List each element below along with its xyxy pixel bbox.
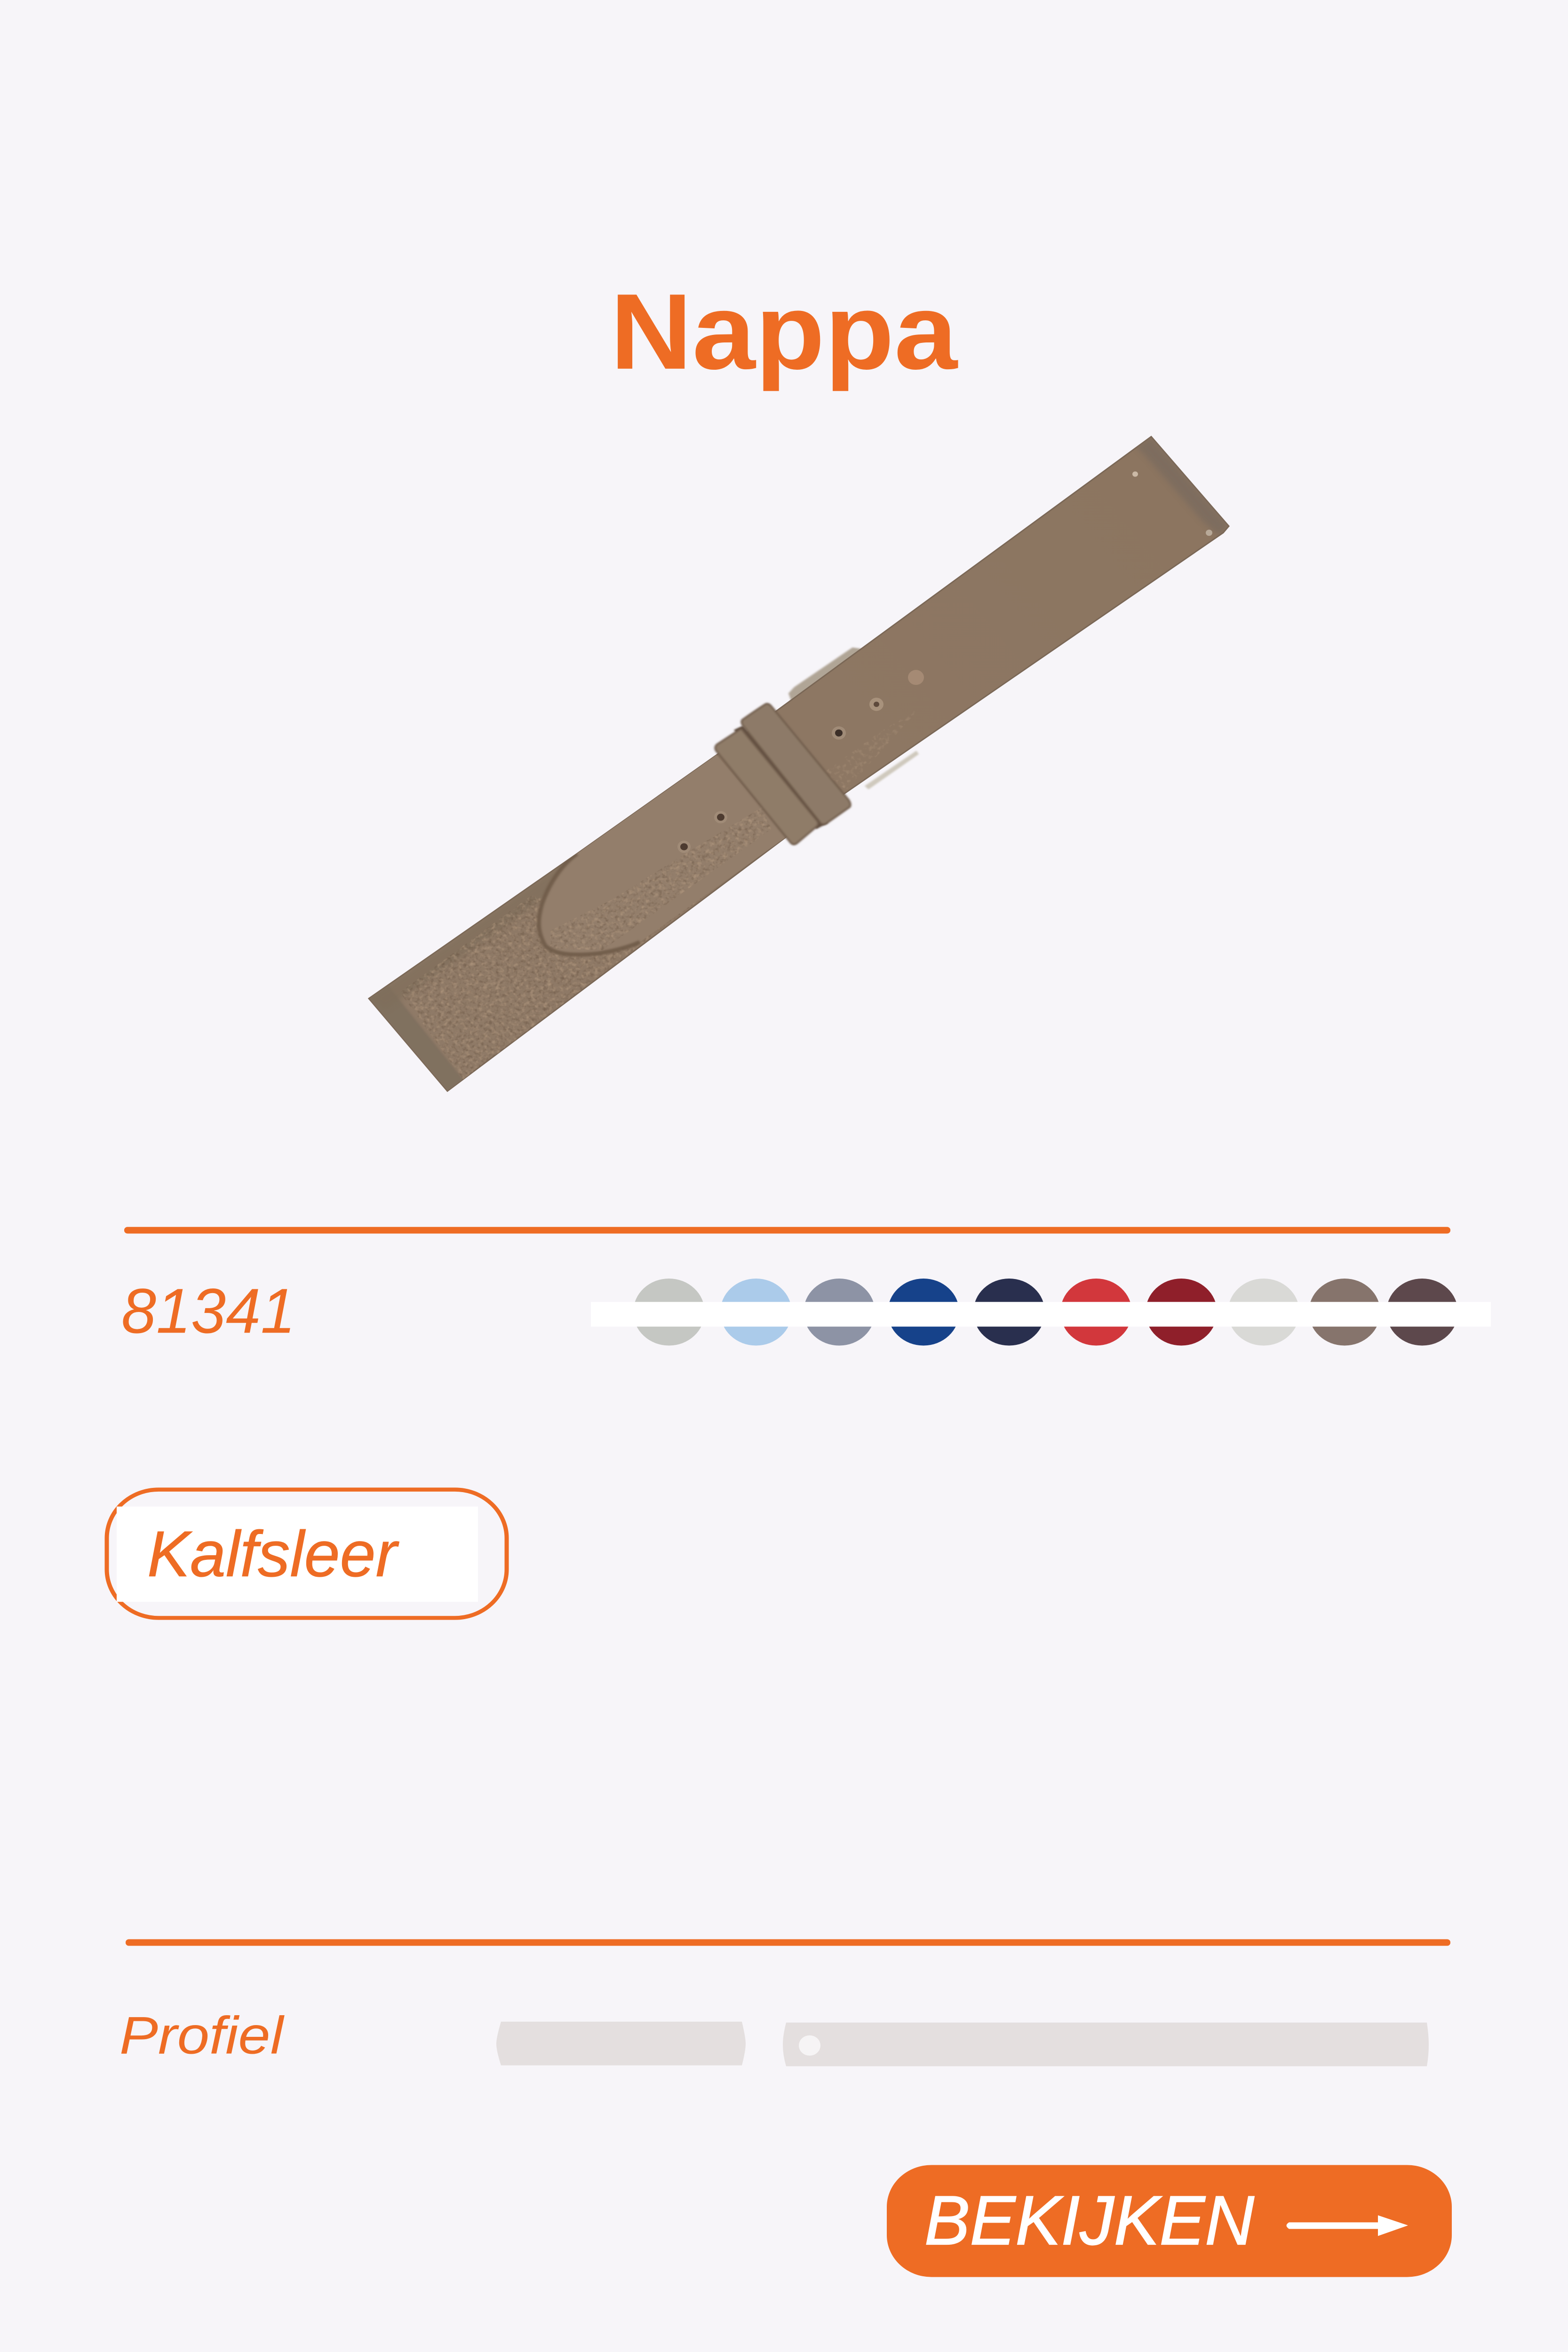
pebble texture near keeper <box>819 706 922 789</box>
buckle metal upper <box>788 647 866 701</box>
strap body <box>369 437 1229 1091</box>
profile label: Profiel <box>119 2006 285 2065</box>
tag white fill <box>117 1507 478 1602</box>
material tag <box>107 1490 507 1618</box>
keeper 1 <box>741 704 851 824</box>
button label: BEKIJKEN <box>924 2182 1254 2259</box>
keeper 2 <box>715 729 818 844</box>
arrow <box>1286 2215 1408 2236</box>
lower upper-edge band <box>390 870 556 998</box>
divider top <box>124 1227 1450 1233</box>
pebble texture on tongue light <box>550 807 772 950</box>
pebble texture lower light <box>403 891 710 1079</box>
pebble texture lower dark <box>403 891 711 1077</box>
white band over swatches <box>591 1302 1491 1327</box>
lower end band <box>370 997 462 1090</box>
title: Nappa <box>610 272 959 392</box>
holes <box>677 471 1212 853</box>
tag outline <box>107 1490 507 1618</box>
strap shading and textures <box>369 437 1229 1091</box>
profile bar long <box>783 2023 1429 2066</box>
button <box>887 2165 1452 2277</box>
pebble texture on tongue dark <box>550 807 772 950</box>
product image: watch strap <box>369 437 1229 1091</box>
gap between keepers <box>734 725 828 829</box>
colour swatches <box>591 1279 1491 1345</box>
profile bar short <box>496 2022 746 2066</box>
profile dot <box>799 2035 820 2056</box>
tongue outline <box>539 854 640 954</box>
divider bottom <box>126 1939 1450 1946</box>
article number: 81341 <box>121 1275 295 1346</box>
buckle metal lower <box>865 751 919 789</box>
upper end band <box>1136 437 1229 535</box>
tag label: Kalfsleer <box>147 1518 399 1590</box>
tongue of strap <box>539 755 787 954</box>
